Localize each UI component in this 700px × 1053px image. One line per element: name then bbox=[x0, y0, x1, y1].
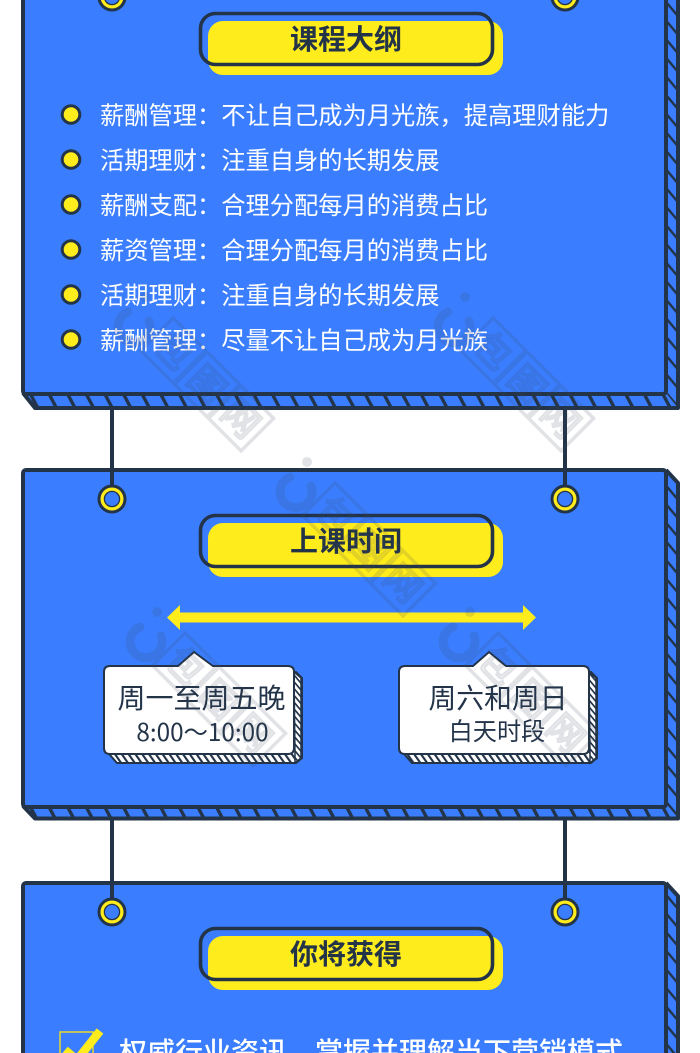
callout: weekdays: 8:00～10:00 bbox=[136, 713, 269, 748]
watermarks: 包 bbox=[305, 483, 368, 545]
pin: left bbox=[99, 899, 125, 925]
connector lines between panels bbox=[112, 405, 565, 903]
pin: right bbox=[552, 0, 578, 10]
heading: class time bbox=[200, 516, 503, 577]
watermarks: 包 bbox=[143, 318, 206, 380]
pin: left bbox=[99, 0, 125, 10]
heading: class time: 上课时间 bbox=[290, 520, 402, 560]
pin: right bbox=[552, 486, 578, 512]
watermarks: 图 bbox=[339, 517, 402, 579]
watermarks: 图 bbox=[189, 667, 252, 729]
watermarks: 网 bbox=[373, 551, 436, 613]
panel: course outline bbox=[23, 0, 678, 408]
outline list: 薪酬管理：尽量不让自己成为月光族 bbox=[100, 321, 488, 356]
panel: class time bbox=[23, 470, 678, 819]
outline list: 活期理财：注重自身的长期发展 bbox=[100, 276, 440, 311]
callout: weekend: 周六和周日 bbox=[428, 677, 568, 717]
watermarks: 图 bbox=[502, 667, 565, 729]
watermarks: 网 bbox=[536, 701, 599, 763]
connector stubs bbox=[112, 470, 565, 490]
heading: course outline bbox=[200, 14, 503, 75]
outline list: 活期理财：注重自身的长期发展 bbox=[100, 141, 440, 176]
pin: right bbox=[552, 899, 578, 925]
outline list bbox=[62, 96, 609, 356]
watermarks: 网 bbox=[223, 701, 286, 763]
outline list: 薪酬管理：不让自己成为月光族，提高理财能力 bbox=[100, 96, 609, 131]
panel: what you get bbox=[23, 883, 678, 1053]
watermarks bbox=[118, 292, 602, 767]
heading: what you get: 你将获得 bbox=[290, 933, 402, 973]
watermarks: 图 bbox=[177, 352, 240, 414]
heading: course outline: 课程大纲 bbox=[290, 18, 402, 58]
heading: what you get bbox=[200, 928, 503, 990]
arrow: double-headed bbox=[167, 605, 536, 630]
watermarks: 包 bbox=[463, 318, 526, 380]
connector stubs bbox=[112, 883, 565, 903]
callout: weekend: 白天时段 bbox=[449, 712, 545, 747]
watermarks: 包 bbox=[468, 633, 531, 695]
callout: weekdays: 周一至周五晚 bbox=[117, 677, 286, 717]
watermarks: 网 bbox=[211, 386, 274, 448]
outline list: 薪资管理：合理分配每月的消费占比 bbox=[100, 231, 488, 266]
watermarks: 网 bbox=[531, 386, 594, 448]
callout: weekdays bbox=[104, 652, 302, 763]
watermarks: 包 bbox=[155, 633, 218, 695]
icon: checkbox bbox=[60, 1031, 100, 1053]
callout: weekend bbox=[399, 652, 597, 763]
outline list: 薪酬支配：合理分配每月的消费占比 bbox=[100, 186, 488, 221]
pin: left bbox=[99, 486, 125, 512]
watermarks: 图 bbox=[497, 352, 560, 414]
